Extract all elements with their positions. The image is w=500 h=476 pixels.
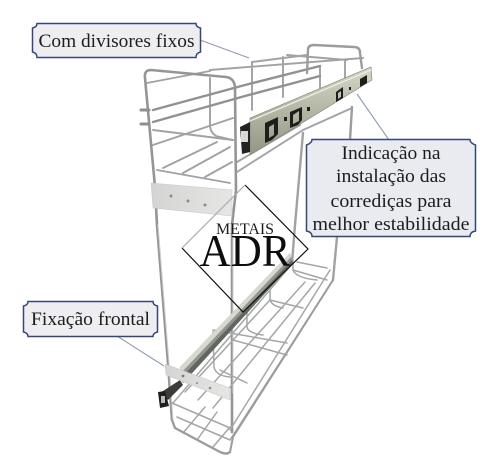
- logo: METAIS ADR: [182, 185, 308, 312]
- callout: Fixação frontal: Fixação frontal: [31, 309, 150, 330]
- callout: Com divisores fixos: [32, 24, 200, 58]
- callout: Indicação na instalação das corrediças para melhor estabilidade: instalação das: [336, 166, 446, 187]
- lower slide rail: [158, 253, 293, 408]
- side rods to posts: [141, 110, 149, 124]
- upper mounting plate: [151, 183, 232, 216]
- callout: Indicação na instalação das corrediças para melhor estabilidade: melhor estabilidade: [312, 214, 470, 235]
- logo diamond: [182, 185, 308, 312]
- upper slide rail: [240, 67, 372, 155]
- lower basket wires: [172, 260, 333, 447]
- rail end bracket: [158, 391, 169, 408]
- rail front bracket: [240, 122, 250, 154]
- front frame: [145, 70, 236, 432]
- product: pull-out wire basket: [141, 45, 363, 454]
- callout: Indicação na instalação das corrediças para melhor estabilidade: [306, 140, 476, 236]
- logo small text: METAIS: [216, 221, 274, 238]
- lower mounting plate: [165, 364, 230, 400]
- callout: Com divisores fixos: Com divisores fixos: [38, 31, 194, 52]
- logo large text: ADR: [200, 225, 291, 276]
- rail slots: [265, 75, 367, 143]
- leader lines: [117, 40, 389, 366]
- upper basket heavy rails: [153, 66, 320, 122]
- callout: Fixação frontal: [24, 302, 158, 336]
- callout: Indicação na instalação das corrediças para melhor estabilidade: corrediças para: [330, 191, 452, 212]
- upper basket wires: [147, 55, 363, 183]
- callout: Indicação na instalação das corrediças para melhor estabilidade: Indicação na: [342, 143, 441, 164]
- back frame: [307, 45, 362, 140]
